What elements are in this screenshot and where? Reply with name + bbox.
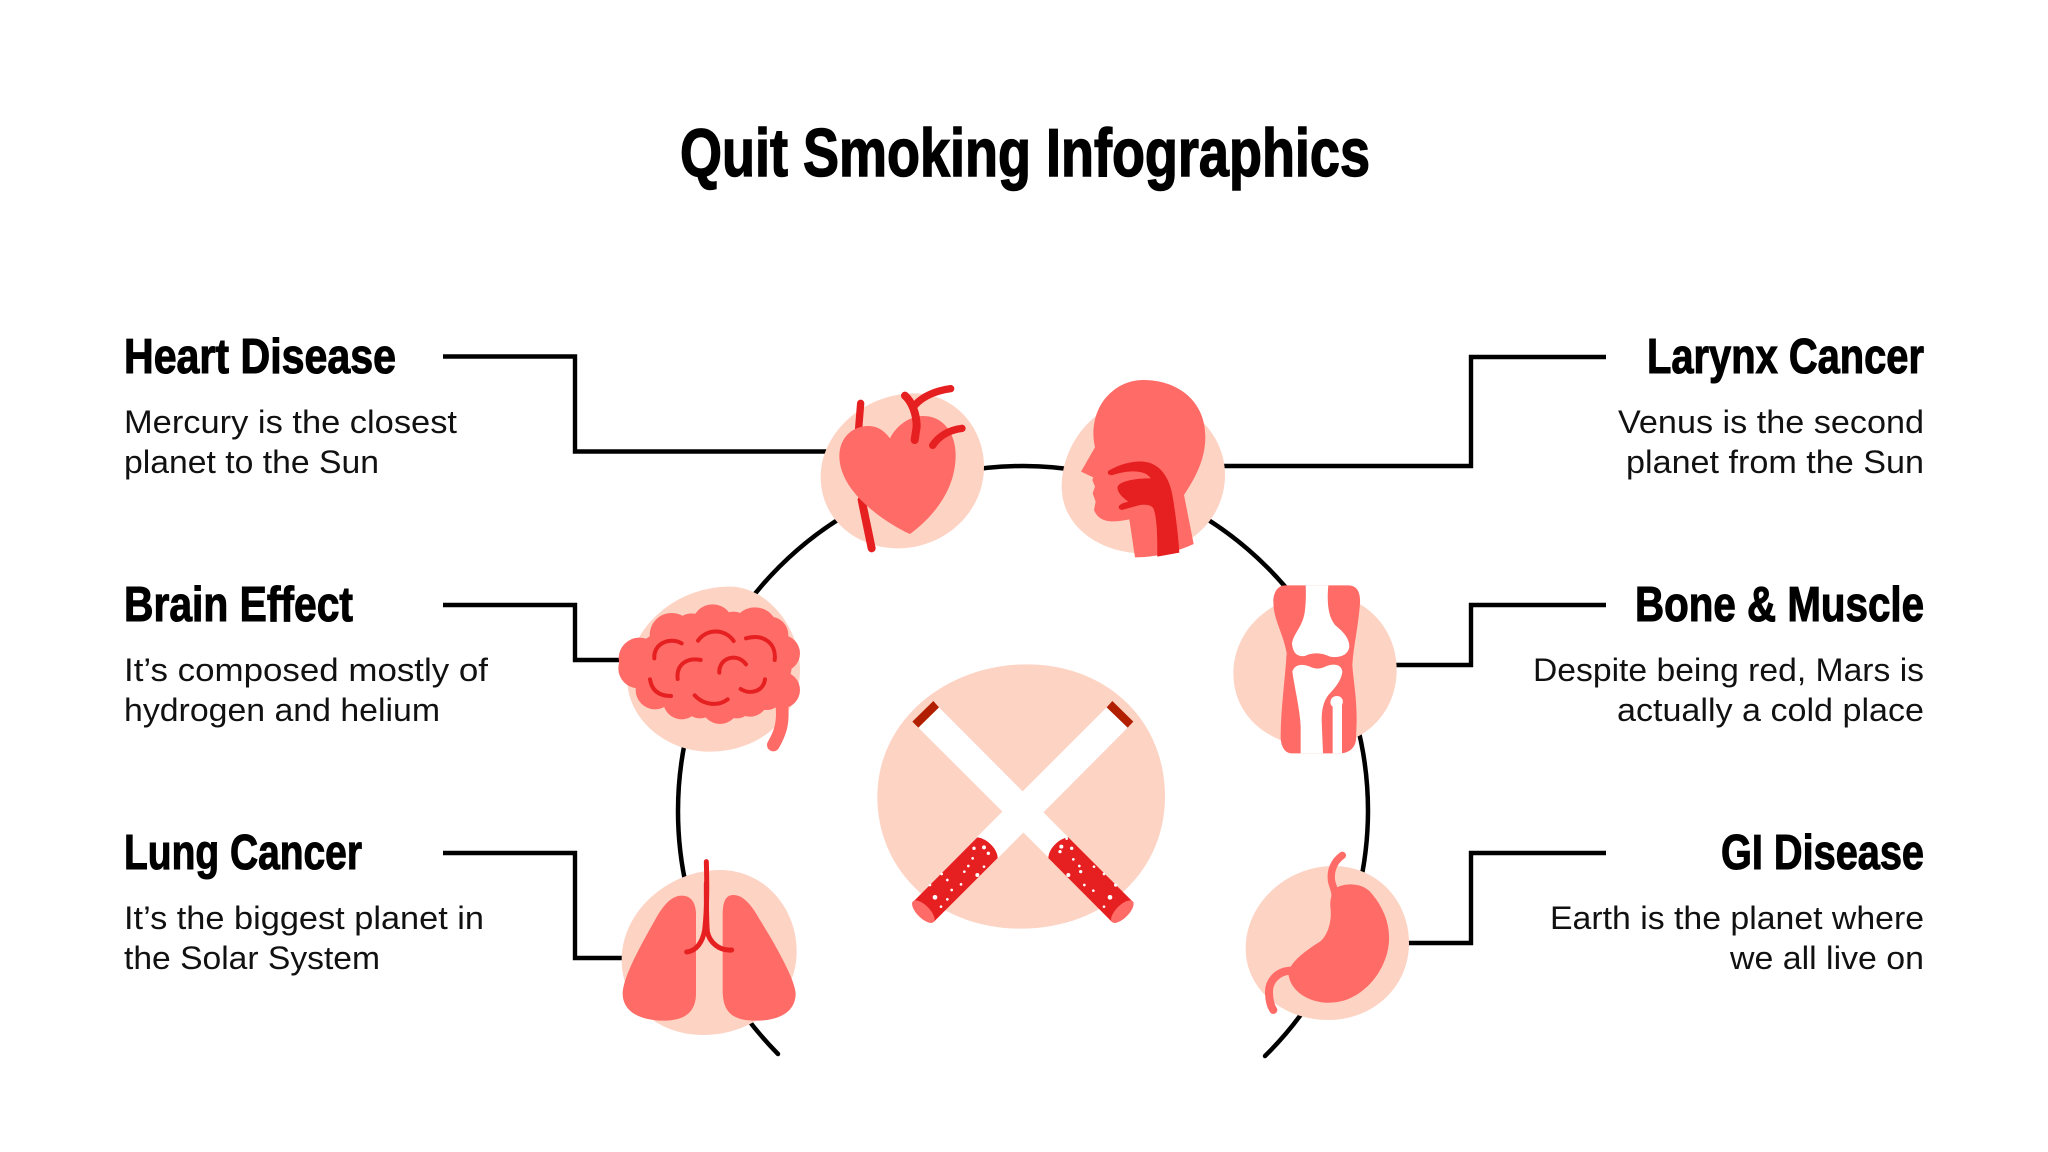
icon: brain [618,587,800,752]
connector: larynx cancer [1222,357,1606,466]
description: heart disease: planet to the Sun [124,444,379,480]
panel: brain effect text [124,578,489,728]
icon: heart [821,389,984,548]
heading: bone and muscle: Bone & Muscle [1635,578,1924,632]
panel: lung cancer text [124,826,484,976]
icon: knee joint [1233,585,1397,753]
description: heart disease [124,404,457,480]
description: larynx cancer [1618,404,1924,480]
heading: heart disease: Heart Disease [124,330,396,384]
title: Quit Smoking Infographics [680,115,1370,191]
icon: stomach [1246,855,1409,1020]
description: heart disease: Mercury is the closest [124,404,457,440]
description: GI disease: Earth is the planet where [1550,900,1924,936]
panel: heart disease text [124,330,457,480]
connector: brain effect [443,605,625,660]
description: GI disease [1550,900,1924,976]
description: bone and muscle [1533,652,1924,728]
connector: heart disease [443,356,828,452]
heading: larynx cancer: Larynx Cancer [1647,330,1924,384]
connector: GI disease [1405,853,1606,943]
description: bone and muscle: actually a cold place [1617,692,1924,728]
description: lung cancer: the Solar System [124,940,380,976]
description: larynx cancer: planet from the Sun [1626,444,1924,480]
description: brain effect: It’s composed mostly of [124,652,489,688]
description: brain effect: hydrogen and helium [124,692,440,728]
description: lung cancer [124,900,484,976]
description: GI disease: we all live on [1729,940,1924,976]
ring connecting the organs [678,466,1368,1056]
icon: head and larynx [1062,380,1225,557]
description: lung cancer: It’s the biggest planet in [124,900,484,936]
heading: lung cancer: Lung Cancer [124,826,362,880]
panel: bone and muscle text [1533,578,1924,728]
icon: crossed cigarettes [877,664,1165,929]
icon: lungs [622,862,797,1035]
description: larynx cancer: Venus is the second [1618,404,1924,440]
description: brain effect [124,652,489,728]
panel: GI disease text [1550,826,1924,976]
heading: GI disease: GI Disease [1721,826,1924,880]
description: bone and muscle: Despite being red, Mars is [1533,652,1924,688]
connector: bone and muscle [1392,605,1606,665]
heading: brain effect: Brain Effect [124,578,353,632]
panel: larynx cancer text [1618,330,1924,480]
connector: lung cancer [443,853,625,958]
